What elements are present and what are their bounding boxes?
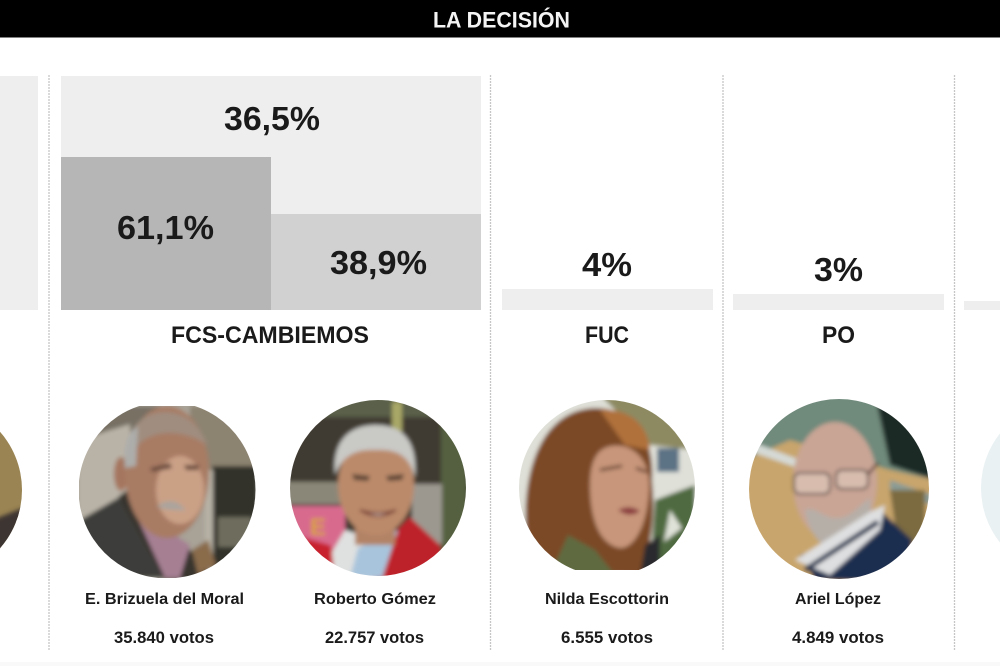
- candidate: Ariel López: Ariel López: [795, 591, 881, 608]
- candidate: Nilda Escottorin: [545, 591, 669, 647]
- portrait: E. Brizuela del Moral: [79, 406, 256, 578]
- bar: FUC: [502, 289, 713, 310]
- bar: PO: [733, 294, 944, 310]
- party label: PO: PO: [822, 322, 855, 349]
- candidate: Nilda Escottorin: Nilda Escottorin: [545, 591, 669, 608]
- candidate: Nilda Escottorin: 6.555 votos: [561, 629, 653, 647]
- bar: Brizuela share: 61,1%: [117, 209, 214, 246]
- portrait: Roberto Gómez: E: [310, 514, 326, 541]
- candidate: E. Brizuela del Moral: 35.840 votos: [114, 629, 214, 647]
- header title: LA DECISIÓN: [433, 8, 570, 32]
- panel: FUC: [502, 246, 713, 647]
- candidate: Roberto Gómez: 22.757 votos: [325, 629, 424, 647]
- candidate: Roberto Gómez: [314, 591, 436, 647]
- candidate: Ariel López: 4.849 votos: [792, 629, 884, 647]
- panel: cropped left party: [0, 76, 38, 580]
- portrait: Roberto Gómez: [290, 400, 466, 576]
- party label: FUC: FUC: [585, 322, 629, 349]
- panel: FCS-Cambiemos: [61, 76, 481, 647]
- bar: Brizuela share: [61, 157, 271, 310]
- party label: FCS-Cambiemos: FCS-CAMBIEMOS: [171, 322, 369, 349]
- portrait: cropped right candidate: [981, 400, 1000, 576]
- candidate: Ariel López: [792, 591, 884, 647]
- bar: Gómez share: 38,9%: [330, 244, 427, 281]
- portrait: Ariel López: [749, 399, 929, 579]
- header band: [0, 0, 1000, 38]
- bar: cropped right party: [964, 301, 1000, 310]
- portrait: Nilda Escottorin: [519, 400, 695, 570]
- candidate: E. Brizuela del Moral: [85, 591, 244, 647]
- bar: FCS-Cambiemos total: 36,5%: [224, 100, 320, 137]
- panel: PO: [733, 251, 944, 647]
- bar: FCS-Cambiemos total: [61, 76, 481, 310]
- percentage: PO: 3%: [814, 251, 863, 288]
- percentage: FUC: 4%: [582, 246, 632, 283]
- bar: cropped left party: [0, 76, 38, 310]
- candidate: E. Brizuela del Moral: E. Brizuela del Moral: [85, 591, 244, 608]
- panel: cropped right party: [964, 301, 1000, 576]
- candidate: Roberto Gómez: Roberto Gómez: [314, 591, 436, 608]
- bar: Gómez share: [271, 214, 481, 310]
- portrait: cropped left candidate: [0, 432, 22, 548]
